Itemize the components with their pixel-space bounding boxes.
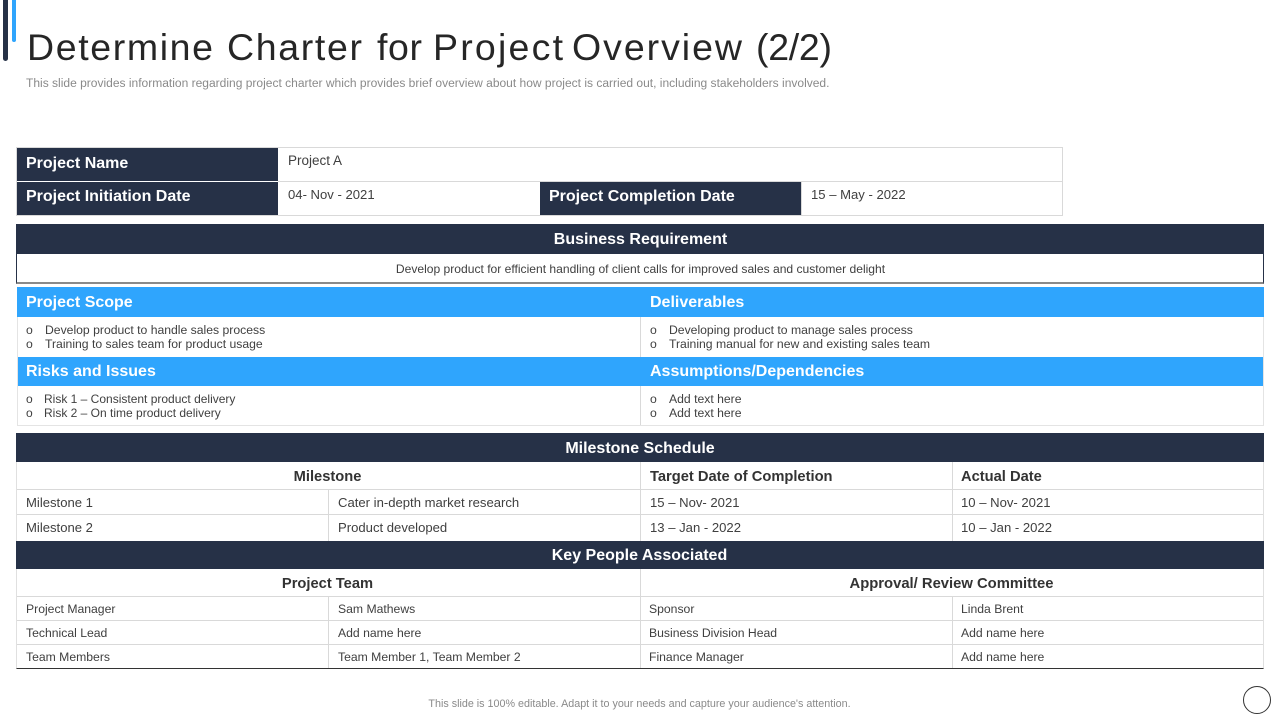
subtitle: This slide provides information regarding project charter which provides brief overview about how project is carried out, including stakeholders involved. xyxy=(26,76,829,90)
panel: project details xyxy=(16,147,1063,216)
row: milestone 1: 10 – Nov- 2021 xyxy=(961,495,1051,510)
heading: project scope: Project Scope xyxy=(26,294,133,311)
business requirement body xyxy=(16,253,1264,284)
row: technical lead: Add name here xyxy=(961,626,1044,640)
heading: assumptions: Assumptions/Dependencies xyxy=(650,363,864,380)
list: deliverables xyxy=(650,323,930,351)
blue header row 1 xyxy=(17,287,1264,317)
column: approval committee: Approval/ Review Committee xyxy=(850,576,1053,592)
row: milestone 1: Cater in-depth market research xyxy=(338,495,519,510)
panel: business requirement xyxy=(16,224,1264,284)
row: team members: Add name here xyxy=(961,650,1044,664)
list: project scope: o xyxy=(26,323,33,337)
business requirement header xyxy=(16,224,1264,254)
label: project initiation date xyxy=(17,182,278,215)
title: Overview xyxy=(572,26,743,68)
heading: risks and issues: Risks and Issues xyxy=(26,363,156,380)
label: project completion date xyxy=(540,182,801,215)
title: Determine xyxy=(27,26,213,68)
list: project scope: Develop product to handle sales process xyxy=(45,323,265,337)
completion date value: 15 – May - 2022 xyxy=(811,187,906,202)
business requirement text: Develop product for efficient handling of client calls for improved sales and customer delight xyxy=(396,262,885,276)
list: risks: o xyxy=(26,406,33,420)
list: assumptions xyxy=(650,392,742,420)
list: assumptions: Add text here xyxy=(669,392,742,406)
initiation date value: 04- Nov - 2021 xyxy=(288,187,375,202)
list: deliverables: Training manual for new and existing sales team xyxy=(669,337,930,351)
list: deliverables: o xyxy=(650,323,657,337)
list: deliverables: Developing product to manage sales process xyxy=(669,323,913,337)
key people header bar xyxy=(16,541,1264,569)
icon: circle xyxy=(1243,686,1271,714)
row: team members: Team Member 1, Team Member 2 xyxy=(338,650,521,664)
column: milestone: Milestone xyxy=(294,469,361,485)
label: project name xyxy=(17,148,278,181)
completion date label text: Project Completion Date xyxy=(549,188,735,205)
milestone heading: Milestone Schedule xyxy=(565,440,715,457)
row: project manager: Linda Brent xyxy=(961,602,1023,616)
row: milestone 2: Milestone 2 xyxy=(26,520,93,535)
title: Charter xyxy=(227,26,362,68)
title: (2/2) xyxy=(756,26,832,68)
title: Project xyxy=(433,26,564,68)
list: risks: Risk 1 – Consistent product delivery xyxy=(44,392,235,406)
row: milestone 1: 15 – Nov- 2021 xyxy=(650,495,740,510)
row: project manager: Sam Mathews xyxy=(338,602,415,616)
row: project manager xyxy=(26,602,1024,616)
title xyxy=(27,26,832,68)
row: milestone 1 xyxy=(26,495,1051,510)
row: technical lead: Technical Lead xyxy=(26,626,107,640)
key people heading: Key People Associated xyxy=(552,547,727,564)
panel: milestone schedule xyxy=(16,433,1264,541)
row: milestone 2 xyxy=(26,520,1052,535)
row: milestone 2: 10 – Jan - 2022 xyxy=(961,520,1052,535)
row: team members xyxy=(26,650,1044,664)
row: project manager: Project Manager xyxy=(26,602,115,616)
list: assumptions: o xyxy=(650,406,657,420)
initiation date label text: Project Initiation Date xyxy=(26,188,190,205)
row: technical lead xyxy=(26,626,1044,640)
row: milestone 2: Product developed xyxy=(338,520,447,535)
milestone header bar xyxy=(16,433,1264,462)
list: assumptions: Add text here xyxy=(669,406,742,420)
footer note: This slide is 100% editable. Adapt it to your needs and capture your audience's attention. xyxy=(428,698,851,710)
list: project scope: Training to sales team for product usage xyxy=(45,337,263,351)
project name value: Project A xyxy=(288,153,342,168)
row: technical lead: Business Division Head xyxy=(649,626,777,640)
row: technical lead: Add name here xyxy=(338,626,421,640)
heading: deliverables: Deliverables xyxy=(650,294,744,311)
list: risks xyxy=(26,392,236,420)
list: project scope xyxy=(26,323,265,351)
project name label text: Project Name xyxy=(26,155,128,172)
column: target date: Target Date of Completion xyxy=(650,469,833,485)
row: team members: Team Members xyxy=(26,650,110,664)
column: project team: Project Team xyxy=(282,576,373,592)
column: actual date: Actual Date xyxy=(961,469,1042,485)
panel: key people associated xyxy=(16,541,1264,669)
list: project scope: o xyxy=(26,337,33,351)
list: risks: Risk 2 – On time product delivery xyxy=(44,406,221,420)
blue header row 2 xyxy=(17,357,1264,386)
list: risks: o xyxy=(26,392,33,406)
row: team members: Finance Manager xyxy=(649,650,744,664)
row: milestone 2: 13 – Jan - 2022 xyxy=(650,520,741,535)
panel: scope, deliverables, risks, assumptions xyxy=(17,287,1264,426)
title: for xyxy=(377,26,422,68)
row: milestone 1: Milestone 1 xyxy=(26,495,93,510)
list: assumptions: o xyxy=(650,392,657,406)
business requirement heading: Business Requirement xyxy=(554,231,727,248)
row: project manager: Sponsor xyxy=(649,602,694,616)
accent bars xyxy=(3,0,16,61)
list: deliverables: o xyxy=(650,337,657,351)
